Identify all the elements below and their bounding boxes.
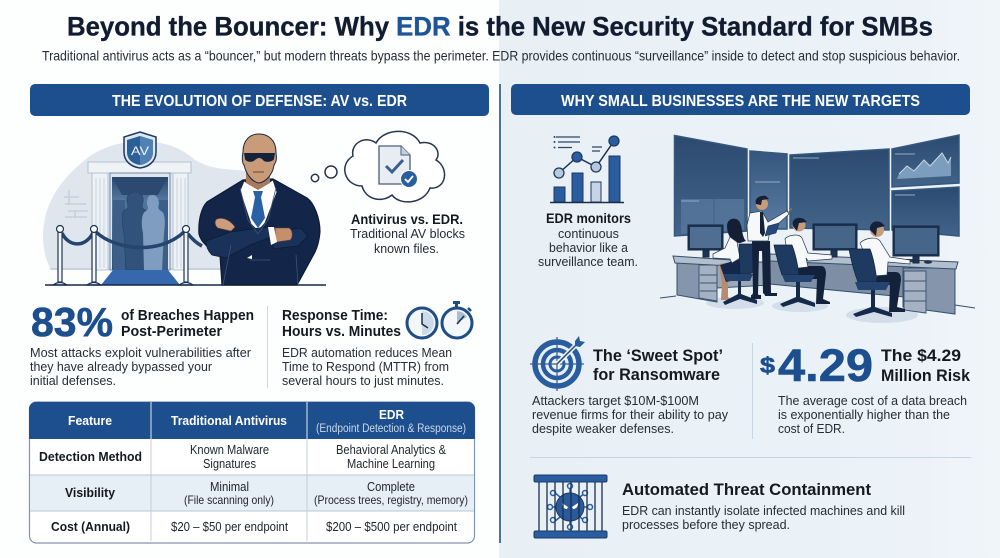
- text: EDR monitors: behavior like a: [549, 240, 629, 255]
- illustration: security operations center: [660, 135, 975, 323]
- heading: evolution of defense: THE EVOLUTION OF DEFENSE: AV vs. EDR: [112, 93, 407, 110]
- stat: sweet spot for ransomware: for Ransomware: [593, 366, 720, 384]
- table row: detection method: Known Malware: [190, 443, 269, 457]
- table row: cost: Cost (Annual): [51, 519, 130, 534]
- stat: 83 percent: Most attacks exploit vulnerabilities after: [30, 345, 252, 360]
- stat: response time: Hours vs. Minutes: [282, 324, 401, 340]
- stat: 83 percent: of Breaches Happen: [121, 308, 254, 324]
- stat: 4.29 million risk: cost of EDR.: [778, 421, 845, 436]
- text: antivirus vs EDR: Traditional AV blocks: [350, 226, 465, 241]
- text: EDR monitors: surveillance team.: [538, 254, 638, 269]
- icon: AV shield: AV: [131, 144, 149, 158]
- person: seated woman: [713, 219, 759, 305]
- feature: automated threat containment: EDR can instantly isolate infected machines and kill: [622, 503, 905, 518]
- table row: visibility: Visibility: [65, 485, 116, 500]
- person: seated analyst center: [774, 218, 832, 307]
- icon: AV shield: [124, 132, 156, 168]
- table row: detection method: Signatures: [203, 457, 256, 471]
- feature: automated threat containment: processes before they spread.: [622, 517, 790, 532]
- text: EDR monitors: continuous: [558, 226, 619, 241]
- stat: 83 percent: 83%: [31, 299, 113, 345]
- table row: visibility: Complete: [367, 480, 415, 494]
- table header row: [29, 402, 475, 439]
- table row: detection method: Machine Learning: [347, 457, 435, 471]
- stat: 83 percent: initial defenses.: [30, 373, 116, 388]
- wall screens: [674, 135, 959, 236]
- table header row: Traditional Antivirus: [171, 413, 287, 428]
- stat: sweet spot for ransomware: [530, 336, 728, 436]
- desk monitors: [688, 224, 939, 263]
- stat: 83 percent: Post-Perimeter: [121, 324, 222, 340]
- icon: behavior chart: [550, 136, 624, 202]
- heading: small business targets: [511, 84, 970, 115]
- title: Beyond the Bouncer: Why EDR is the New Security Standard for SMBs: [67, 12, 933, 42]
- table row: cost: $200 – $500 per endpoint: [326, 520, 457, 534]
- table row: cost: $20 – $50 per endpoint: [171, 520, 288, 534]
- person: standing presenter: [747, 196, 792, 299]
- icon: clock and stopwatch: [407, 301, 472, 338]
- stat: 4.29 million risk: The $4.29: [881, 347, 961, 365]
- text: antivirus vs EDR: [350, 211, 465, 256]
- table row: visibility: (File scanning only): [184, 493, 274, 507]
- stat: response time: Response Time:: [282, 308, 388, 324]
- stat: sweet spot for ransomware: Attackers target $10M-$100M: [532, 393, 699, 408]
- stat: response time: [282, 301, 472, 388]
- stat: response time: Time to Respond (MTTR) from: [282, 359, 449, 374]
- icon: target with arrow: [530, 336, 585, 391]
- table header row: Feature: [68, 413, 112, 428]
- stat: 83 percent: [30, 299, 254, 388]
- heading: evolution of defense: [30, 84, 489, 116]
- stat: response time: several hours to just minutes.: [282, 373, 444, 388]
- panel: small business targets: [511, 84, 975, 538]
- stat: 4.29 million risk: is exponentially higher than the: [778, 407, 950, 422]
- feature: automated threat containment: Automated Threat Containment: [622, 481, 872, 499]
- table row: detection method: Detection Method: [39, 449, 142, 464]
- stat: 4.29 million risk: Million Risk: [881, 367, 971, 385]
- text: antivirus vs EDR: known files.: [374, 241, 439, 256]
- stat: sweet spot for ransomware: despite weaker defenses.: [532, 421, 674, 436]
- table row: visibility: [30, 475, 474, 511]
- illustration: bouncer: [199, 134, 320, 285]
- stat: response time: EDR automation reduces Mean: [282, 345, 452, 360]
- table row: detection method: Behavioral Analytics &: [336, 443, 447, 457]
- table: feature comparison: [29, 402, 475, 543]
- illustration: entrance with stanchions: [43, 132, 326, 285]
- stat: 83 percent: they have already bypassed your: [30, 359, 213, 374]
- table header row: EDR: [379, 407, 405, 422]
- table row: detection method: [39, 443, 447, 471]
- stat: sweet spot for ransomware: The ‘Sweet Spot’: [593, 347, 723, 365]
- stat: 4.29 million risk: [760, 340, 971, 436]
- person: seated analyst right: [849, 221, 910, 317]
- table header row: (Endpoint Detection & Response): [316, 423, 466, 435]
- text: antivirus vs EDR: Antivirus vs. EDR.: [351, 211, 463, 227]
- panel: evolution of defense: [29, 84, 489, 543]
- text: EDR monitors: [538, 210, 638, 269]
- desks: [673, 254, 958, 314]
- stat: sweet spot for ransomware: revenue firms for their ability to pay: [532, 407, 728, 422]
- stat: 4.29 million risk: The average cost of a data breach: [778, 393, 967, 408]
- heading: small business targets: WHY SMALL BUSINESSES ARE THE NEW TARGETS: [561, 93, 920, 110]
- stat: 4.29 million risk: 4.29: [778, 340, 873, 391]
- icon: caged virus: [534, 475, 607, 538]
- feature: automated threat containment: [534, 475, 905, 538]
- table row: visibility: (Process trees, registry, memory): [314, 493, 468, 507]
- table row: visibility: Minimal: [210, 480, 249, 494]
- icon: thought bubble with file check: [311, 131, 445, 202]
- text: EDR monitors: EDR monitors: [546, 210, 631, 226]
- table row: cost: [51, 519, 457, 534]
- stat: 4.29 million risk: $: [760, 353, 775, 378]
